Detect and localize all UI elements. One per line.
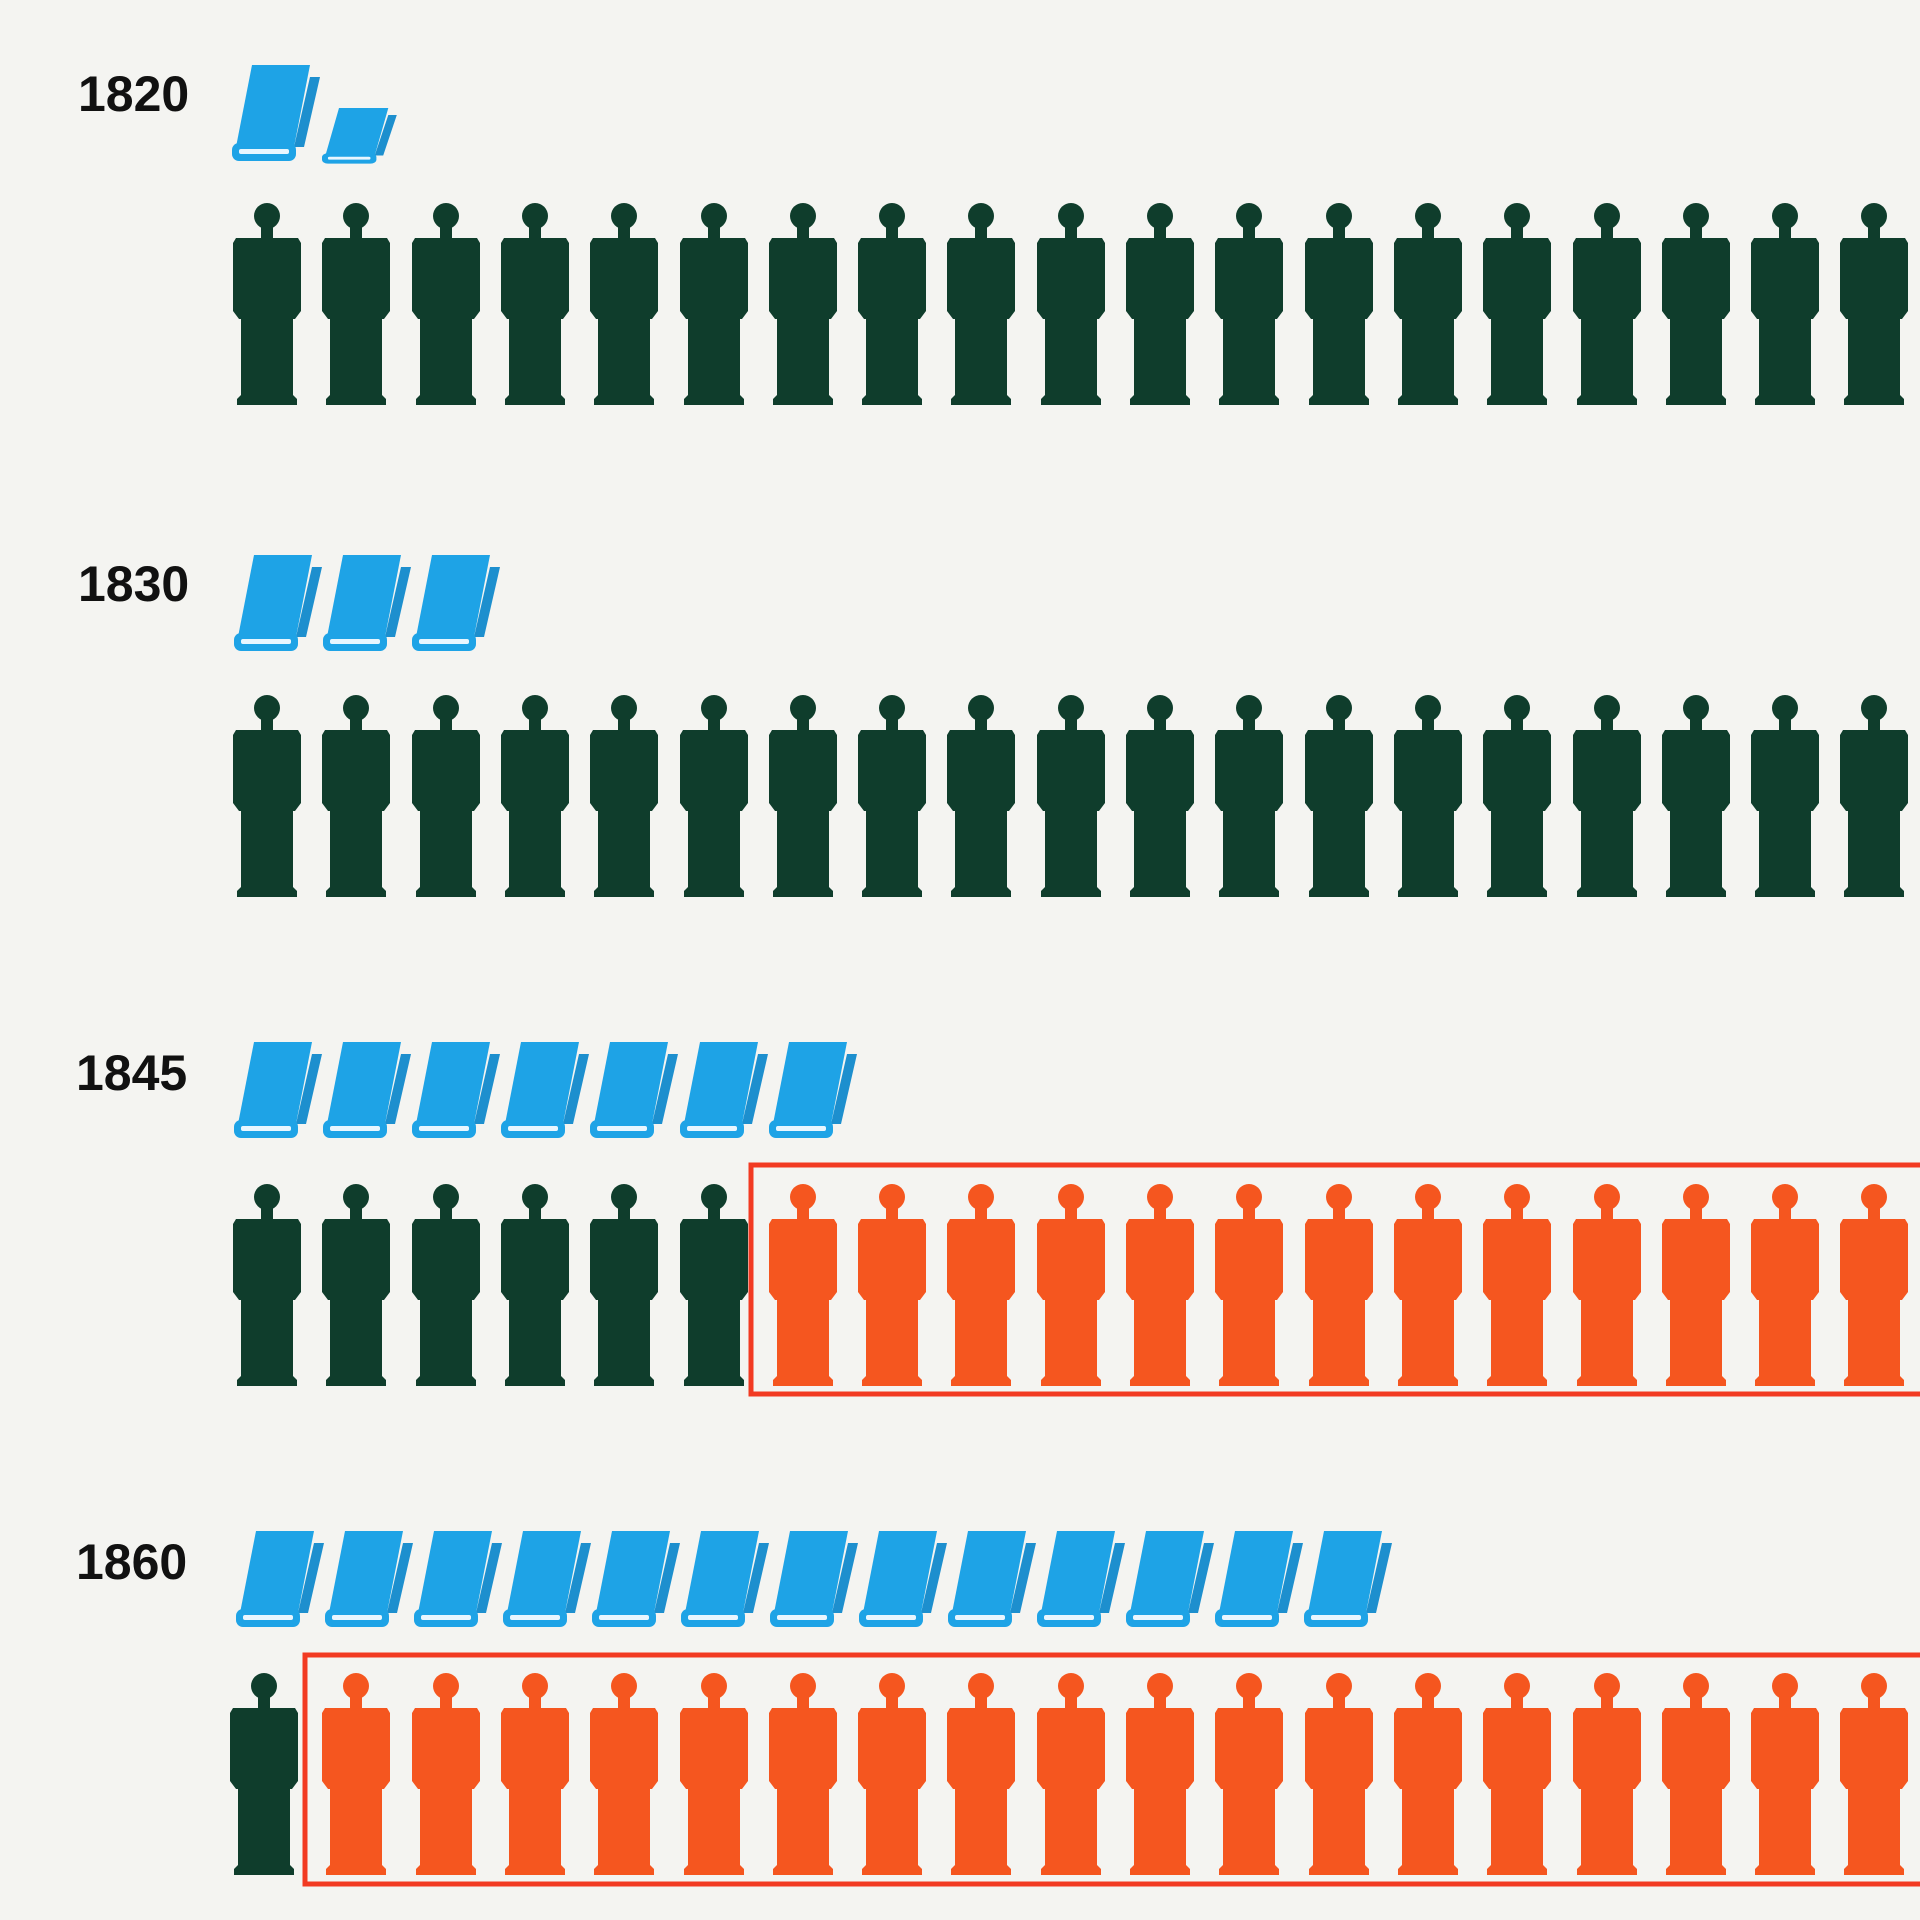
books 1845 bbox=[234, 1042, 857, 1138]
row 1845 bbox=[76, 1042, 1920, 1394]
row 1820 bbox=[78, 65, 1908, 405]
row 1860 bbox=[76, 1531, 1920, 1884]
year label 1830: 1830 bbox=[78, 556, 189, 612]
people 1820 bbox=[233, 203, 1908, 405]
people 1845 dark bbox=[233, 1184, 748, 1386]
books 1830 bbox=[234, 555, 500, 651]
highlight box 1845 bbox=[751, 1165, 1920, 1394]
year label 1820: 1820 bbox=[78, 66, 189, 122]
people 1830 bbox=[233, 695, 1908, 897]
books 1860 bbox=[236, 1531, 1392, 1627]
year label 1845: 1845 bbox=[76, 1045, 187, 1101]
year label 1860: 1860 bbox=[76, 1534, 187, 1590]
row 1830 bbox=[78, 555, 1908, 897]
highlight box 1860 bbox=[305, 1655, 1920, 1884]
people 1860 dark bbox=[230, 1673, 298, 1875]
people 1860 orange bbox=[322, 1673, 1908, 1875]
books 1820 bbox=[232, 65, 397, 164]
people 1845 orange bbox=[769, 1184, 1908, 1386]
